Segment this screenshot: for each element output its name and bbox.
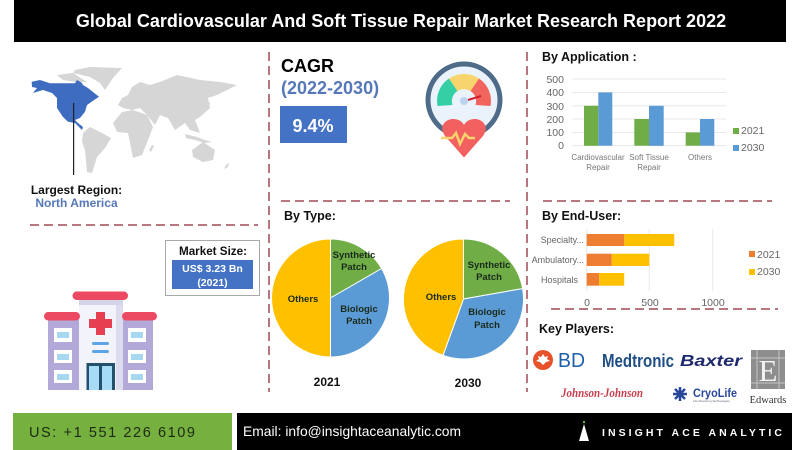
logo: Medtronic: Medtronic: [602, 351, 674, 371]
market size box: US$ 3.23 Bn: [182, 263, 243, 275]
bar chart: by end-user: [532, 229, 781, 309]
pie chart 2021: Biologic: [340, 304, 378, 315]
By Type heading: By Type:: [284, 209, 336, 223]
bar chart: by application: Others: [688, 153, 712, 162]
bar chart: by application: Cardiovascular: [571, 153, 625, 162]
logo: CryoLife: Life Restoring Technologies: [693, 399, 730, 403]
bar chart: by application: [546, 74, 765, 172]
pie chart 2030: [403, 239, 524, 390]
bar chart: by end-user: 2021: [757, 249, 781, 261]
pie chart 2030: Others: [426, 292, 456, 303]
bar chart: by end-user: 0: [584, 297, 590, 309]
market size box: (2021): [197, 277, 228, 289]
bar chart: by application: 0: [558, 140, 564, 152]
bar chart: by end-user: Hospitals: [541, 275, 578, 285]
bar chart: by end-user: Specialty...: [541, 235, 584, 245]
CAGR heading: CAGR: [281, 56, 334, 76]
pie chart 2021: 2021: [314, 375, 341, 389]
pie chart 2030: Patch: [474, 320, 500, 331]
logo: CryoLife: CryoLife: [693, 388, 737, 400]
pie chart 2030: 2030: [455, 376, 482, 390]
CAGR value: 9.4%: [292, 116, 334, 136]
market size box: [166, 240, 260, 296]
bar chart: by application: Soft Tissue: [629, 153, 669, 162]
bar chart: by end-user: Ambulatory...: [532, 255, 584, 265]
CAGR value: [280, 106, 347, 143]
CAGR heading: (2022-2030): [281, 78, 379, 98]
bar chart: by application: 100: [546, 127, 564, 139]
bar chart: by application: 2021: [741, 125, 765, 137]
bar chart: by application: 500: [546, 74, 564, 86]
region label: Largest Region:: [31, 183, 122, 197]
logo: BD: BD: [558, 350, 585, 372]
pie chart 2021: Synthetic: [333, 250, 375, 261]
pie chart 2021: Others: [288, 294, 318, 305]
bar chart: by application: 300: [546, 101, 564, 113]
By End-User heading: By End-User:: [542, 209, 621, 223]
title banner: Global Cardiovascular And Soft Tissue Repair Market Research Report 2022: [76, 11, 726, 31]
icon: heart gauge: [428, 64, 500, 158]
region label: [31, 183, 122, 210]
pie chart 2030: Biologic: [468, 307, 506, 318]
pie chart 2030: Patch: [476, 272, 502, 283]
footer email and brand: Email: info@insightaceanalytic.com: [243, 423, 461, 439]
logo: Johnson and Johnson: Johnson-Johnson: [560, 385, 643, 400]
pie chart 2030: Synthetic: [468, 260, 510, 271]
market size box: Market Size:: [179, 244, 247, 258]
bar chart: by application: 2030: [741, 142, 765, 154]
logo: Edwards: E: [759, 353, 777, 388]
title banner: [14, 0, 786, 42]
bar chart: by end-user: 1000: [701, 297, 725, 309]
By Application heading: By Application :: [542, 50, 637, 64]
logo: Edwards: [750, 350, 786, 406]
bar chart: by application: 400: [546, 87, 564, 99]
bar chart: by application: 200: [546, 114, 564, 126]
footer phone: [13, 413, 232, 450]
bar chart: by application: Repair: [637, 163, 661, 172]
logo: Baxter: Baxter: [680, 353, 743, 370]
bar chart: by end-user: 500: [641, 297, 659, 309]
logo: CryoLife: [673, 387, 737, 403]
icon: hospital: [44, 292, 157, 390]
bar chart: by application: Repair: [586, 163, 610, 172]
footer email and brand: INSIGHT ACE ANALYTIC: [602, 427, 782, 439]
world map: [31, 67, 237, 210]
logo: Edwards: Edwards: [750, 395, 786, 406]
pie chart 2021: [272, 239, 390, 389]
Key Players heading: Key Players:: [539, 322, 614, 336]
region label: North America: [35, 196, 118, 210]
bar chart: by end-user: 2030: [757, 266, 781, 278]
footer email and brand: [237, 413, 792, 450]
footer phone: US: +1 551 226 6109: [29, 425, 195, 441]
pie chart 2021: Patch: [341, 262, 367, 273]
pie chart 2021: Patch: [346, 316, 372, 327]
key player logos: [533, 350, 786, 406]
CAGR heading: [281, 56, 379, 98]
icon: brand mark: [579, 421, 589, 441]
logo: BD: [533, 350, 585, 372]
